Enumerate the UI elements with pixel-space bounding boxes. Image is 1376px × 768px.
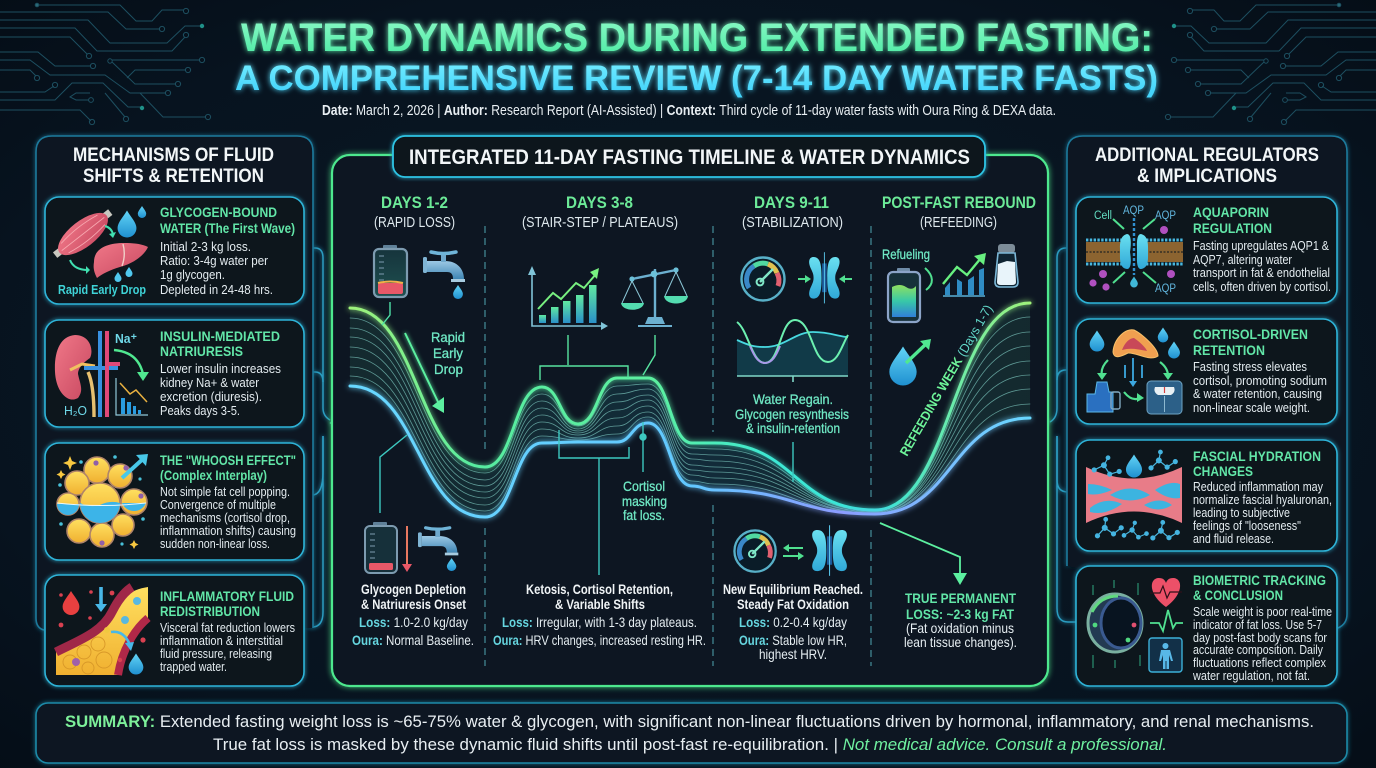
card: fascial hydration changes — [1076, 440, 1337, 551]
subtitle: date, author, context: Date: March 2, 2026 | Author: Research Report (AI-Assisted) | Context: Third cycle of 11-day water fasts with Oura Ring & DEXA data. — [322, 103, 1056, 119]
icon: depleted battery, days 1-2 — [374, 245, 407, 297]
card text: FASCIAL HYDRATION — [1193, 449, 1321, 464]
text: days 9-11 details: Loss: 0.2-0.4 kg/day — [739, 614, 847, 630]
card text: Peaks days 3-5. — [160, 403, 240, 418]
phase dividers — [485, 226, 871, 666]
icon: fat cell cluster with water — [56, 454, 148, 549]
card text: inflammation shifts) causing — [160, 523, 296, 538]
text: days 1-2 details — [352, 582, 474, 648]
connector: water regain to curve — [792, 442, 794, 482]
timeline heading pill: INTEGRATED 11-DAY FASTING TIMELINE & WATER DYNAMICS — [409, 145, 970, 169]
card text: feelings of "looseness" — [1193, 518, 1301, 533]
card text: CORTISOL-DRIVEN — [1193, 327, 1308, 342]
icon: aquaporin channel in membrane: AQP — [1123, 205, 1144, 217]
column heading: days 1-2 — [374, 194, 455, 231]
panel: additional regulators — [1067, 136, 1347, 686]
column heading: days 1-2: (RAPID LOSS) — [374, 215, 455, 231]
card: inflammatory fluid redistribution — [45, 575, 304, 686]
summary bar: True fat loss is masked by these dynamic fluid shifts until post-fast re-equilibration. | Not medical advice. Consult a professional. — [213, 736, 1167, 754]
card text: excretion (diuresis). — [160, 389, 262, 404]
card text: cells, often driven by cortisol. — [1193, 279, 1331, 294]
annotation: water regain: Water Regain. — [753, 391, 833, 407]
icon: aquaporin channel in membrane: AQP — [1155, 210, 1176, 222]
card text: Fasting stress elevates — [1193, 359, 1307, 374]
annotation: rapid early drop: Drop — [434, 361, 463, 377]
text: days 1-2 details: Loss: 1.0-2.0 kg/day — [359, 614, 468, 630]
card text: Ratio: 3-4g water per — [160, 253, 269, 268]
column heading: post-fast rebound — [882, 194, 1036, 231]
card text: inflammation & interstitial — [160, 633, 283, 648]
card text: Depleted in 24-48 hrs. — [160, 282, 273, 297]
card text: trapped water. — [160, 659, 227, 674]
connector: curve to lower icons — [380, 435, 407, 513]
card: glycogen-bound water — [45, 197, 304, 304]
icon: kidney with sodium arrow — [55, 331, 149, 418]
card text — [1193, 205, 1331, 294]
card text: cortisol, promoting sodium — [1193, 373, 1327, 388]
card text — [1193, 327, 1327, 415]
icon: muscle and liver — [47, 202, 148, 282]
card text: AQUAPORIN — [1193, 205, 1269, 220]
bracket connectors: lower curve — [559, 422, 646, 575]
card text: Not simple fat cell popping. — [160, 484, 290, 499]
card: cortisol-driven retention — [1076, 319, 1337, 424]
card text: & CONCLUSION — [1193, 588, 1283, 603]
text: days 9-11 details: highest HRV. — [759, 646, 827, 662]
icon: vessel and fat tissue — [56, 587, 148, 675]
panel: integrated timeline — [332, 136, 1048, 686]
connector: battery to curve — [382, 302, 390, 325]
icon: stair-step bar chart — [528, 266, 608, 330]
card text: non-linear scale weight. — [1193, 400, 1310, 415]
title — [235, 16, 1158, 98]
card text: Visceral fat reduction lowers — [160, 620, 295, 635]
column heading: post-fast rebound: (REFEEDING) — [920, 215, 997, 231]
column heading: post-fast rebound: POST-FAST REBOUND — [882, 194, 1036, 212]
card text: normalize fascial hyaluronan, — [1193, 492, 1332, 507]
annotation: water regain — [735, 391, 849, 436]
annotation: cortisol masking fat loss — [622, 478, 667, 523]
card text: 1g glycogen. — [160, 267, 225, 282]
title: WATER DYNAMICS DURING EXTENDED FASTING: — [241, 16, 1153, 60]
card: insulin-mediated natriuresis — [45, 320, 304, 427]
annotation: rapid early drop: Early — [433, 345, 463, 361]
card: biometric tracking and conclusion — [1076, 566, 1337, 686]
card text: kidney Na+ & water — [160, 375, 260, 390]
card: whoosh effect — [45, 443, 304, 560]
mini wave chart: water regain — [737, 320, 848, 382]
card text: AQP7, altering water — [1193, 252, 1293, 267]
card text: CHANGES — [1193, 464, 1253, 479]
annotation: water regain: & insulin-retention — [746, 420, 840, 436]
summary bar: SUMMARY: Extended fasting weight loss is ~65-75% water & glycogen, with significant non-linear fluctuations driven by hormonal, inflammatory, and renal mechanisms. — [65, 713, 1314, 731]
label: refueling: Refueling — [882, 246, 930, 262]
icon: faucet, lower — [418, 528, 458, 571]
annotation: cortisol masking fat loss: masking — [622, 493, 667, 509]
text: days 3-8 details: & Variable Shifts — [555, 597, 645, 612]
arrow: rapid early drop — [405, 333, 444, 413]
annotation: water regain: Glycogen resynthesis — [735, 406, 849, 422]
card text: transport in fat & endothelial — [1193, 265, 1330, 280]
column heading: days 3-8 — [522, 194, 678, 231]
wave chart: water weight curves — [350, 303, 1030, 517]
icon: exchange arrows — [783, 544, 804, 560]
icon caption: Rapid Early Drop — [58, 282, 146, 297]
callout: true permanent loss: TRUE PERMANENT — [905, 590, 1016, 606]
callout: true permanent loss — [904, 590, 1017, 650]
text: days 3-8 details: Loss: Irregular, with 1-3 day plateaus. — [502, 614, 697, 630]
callout: true permanent loss: LOSS: ~2-3 kg FAT — [906, 606, 1014, 622]
right connector lines into timeline — [1039, 248, 1076, 622]
text: days 3-8 details — [493, 582, 706, 648]
card text: Convergence of multiple — [160, 497, 276, 512]
annotation: rapid early drop — [431, 329, 465, 377]
card text: Fasting upregulates AQP1 & — [1193, 238, 1329, 253]
label: refeeding week: REFEEDING WEEK (Days 1-7) — [897, 302, 996, 458]
panel heading: & IMPLICATIONS — [1137, 165, 1277, 187]
card text: & water retention, causing — [1193, 386, 1322, 401]
card text — [160, 588, 295, 674]
card text: REGULATION — [1193, 221, 1272, 236]
column heading: days 1-2: DAYS 1-2 — [381, 194, 448, 212]
column heading: days 9-11: (STABILIZATION) — [742, 215, 843, 231]
panel heading — [1095, 144, 1319, 187]
column heading: days 9-11 — [742, 194, 843, 231]
card text: accurate composition. Daily — [1193, 642, 1323, 657]
card text: Scale weight is poor real-time — [1193, 604, 1332, 619]
card text: (Complex Interplay) — [160, 467, 267, 483]
column heading: days 3-8: DAYS 3-8 — [566, 194, 633, 212]
title: A COMPREHENSIVE REVIEW (7-14 DAY WATER FASTS) — [235, 59, 1158, 98]
card text: WATER (The First Wave) — [160, 220, 295, 236]
card text: THE "WHOOSH EFFECT" — [160, 452, 296, 468]
panel heading: SHIFTS & RETENTION — [83, 165, 264, 187]
card text: Reduced inflammation may — [1193, 479, 1323, 494]
icon: rebound chart — [943, 253, 986, 296]
card text: and fluid release. — [1193, 531, 1274, 546]
arrow: true permanent loss — [880, 523, 967, 585]
timeline heading pill — [393, 136, 985, 177]
summary bar — [36, 703, 1347, 763]
card text: INSULIN-MEDIATED — [160, 328, 280, 344]
annotation: cortisol masking fat loss: Cortisol — [623, 478, 665, 494]
text: days 1-2 details: Oura: Normal Baseline. — [352, 632, 474, 648]
text: days 9-11 details: Steady Fat Oxidation — [737, 597, 849, 612]
card text: Initial 2-3 kg loss. — [160, 239, 251, 254]
icon: adrenal gland, drops and scale — [1087, 328, 1182, 414]
text: days 3-8 details: Ketosis, Cortisol Retention, — [526, 582, 673, 597]
card text: water regulation, not fat. — [1192, 668, 1310, 683]
card text — [160, 204, 295, 297]
icon: kidney with sodium arrow: Na⁺ — [115, 331, 137, 346]
card text: Lower insulin increases — [160, 361, 281, 376]
bracket connectors: plateaus — [540, 335, 655, 380]
icon: water drop with up arrow — [889, 339, 931, 386]
text: days 9-11 details: Oura: Stable low HR, — [739, 632, 847, 648]
icon: smart ring, heart, pulse and body scan — [1088, 578, 1183, 672]
annotation: rapid early drop: Rapid — [431, 329, 465, 345]
icon: depleted battery with arrow — [365, 522, 412, 573]
card text: leading to subjective — [1193, 505, 1290, 520]
annotation: cortisol masking fat loss: fat loss. — [623, 507, 665, 523]
callout: true permanent loss: (Fat oxidation minus — [906, 620, 1014, 636]
card text — [160, 328, 281, 418]
panel: mechanisms of fluid shifts — [36, 136, 313, 686]
column heading: days 3-8: (STAIR-STEP / PLATEAUS) — [522, 215, 678, 231]
icon: balance scale — [621, 267, 688, 327]
callout: true permanent loss: lean tissue changes). — [904, 634, 1017, 650]
icon: refilled battery — [888, 268, 932, 322]
card text: mechanisms (cortisol drop, — [160, 510, 290, 525]
column heading: days 9-11: DAYS 9-11 — [754, 194, 829, 212]
text: days 1-2 details: Glycogen Depletion — [361, 582, 466, 597]
icon: salt shaker — [995, 244, 1018, 287]
icon: gauge, days 9-11 — [742, 258, 784, 300]
text: days 9-11 details: New Equilibrium Reached. — [723, 582, 863, 597]
card text — [1192, 573, 1332, 683]
card text: fluctuations reflect complex — [1193, 655, 1326, 670]
icon: aquaporin channel, lower — [812, 525, 847, 576]
card text: RETENTION — [1193, 343, 1265, 358]
card text: GLYCOGEN-BOUND — [160, 204, 277, 220]
text: days 3-8 details: Oura: HRV changes, increased resting HR. — [493, 632, 706, 648]
card text: sudden non-linear loss. — [160, 536, 270, 551]
icon: faucet, days 1-2 — [423, 252, 465, 299]
card text: BIOMETRIC TRACKING — [1193, 573, 1326, 588]
icon: kidney with sodium arrow: H₂O — [64, 403, 87, 418]
left connector lines into timeline — [305, 248, 340, 627]
panel heading — [73, 144, 274, 187]
text: days 9-11 details — [723, 582, 863, 662]
card text — [1193, 449, 1332, 546]
icon: aquaporin channel in membrane: Cell — [1094, 210, 1112, 222]
icon: fascia tissue with molecules — [1086, 447, 1182, 543]
card: aquaporin regulation — [1076, 197, 1337, 303]
card text: NATRIURESIS — [160, 343, 243, 359]
text: days 1-2 details: & Natriuresis Onset — [361, 597, 466, 612]
icon: aquaporin channel in membrane — [1086, 205, 1183, 295]
icon: aquaporin channel in membrane: AQP — [1155, 283, 1176, 295]
icon: gauge, lower — [734, 530, 776, 572]
panel heading: MECHANISMS OF FLUID — [73, 144, 274, 166]
card text: REDISTRIBUTION — [160, 603, 260, 619]
card text: INFLAMMATORY FLUID — [160, 588, 294, 604]
card text — [160, 452, 296, 551]
panel heading: ADDITIONAL REGULATORS — [1095, 144, 1319, 166]
card text: fluid pressure, releasing — [160, 646, 272, 661]
card text: day post-fast body scans for — [1193, 630, 1328, 645]
icon: aquaporin channel, days 9-11 — [798, 252, 852, 303]
card text: indicator of fat loss. Use 5-7 — [1193, 617, 1322, 632]
